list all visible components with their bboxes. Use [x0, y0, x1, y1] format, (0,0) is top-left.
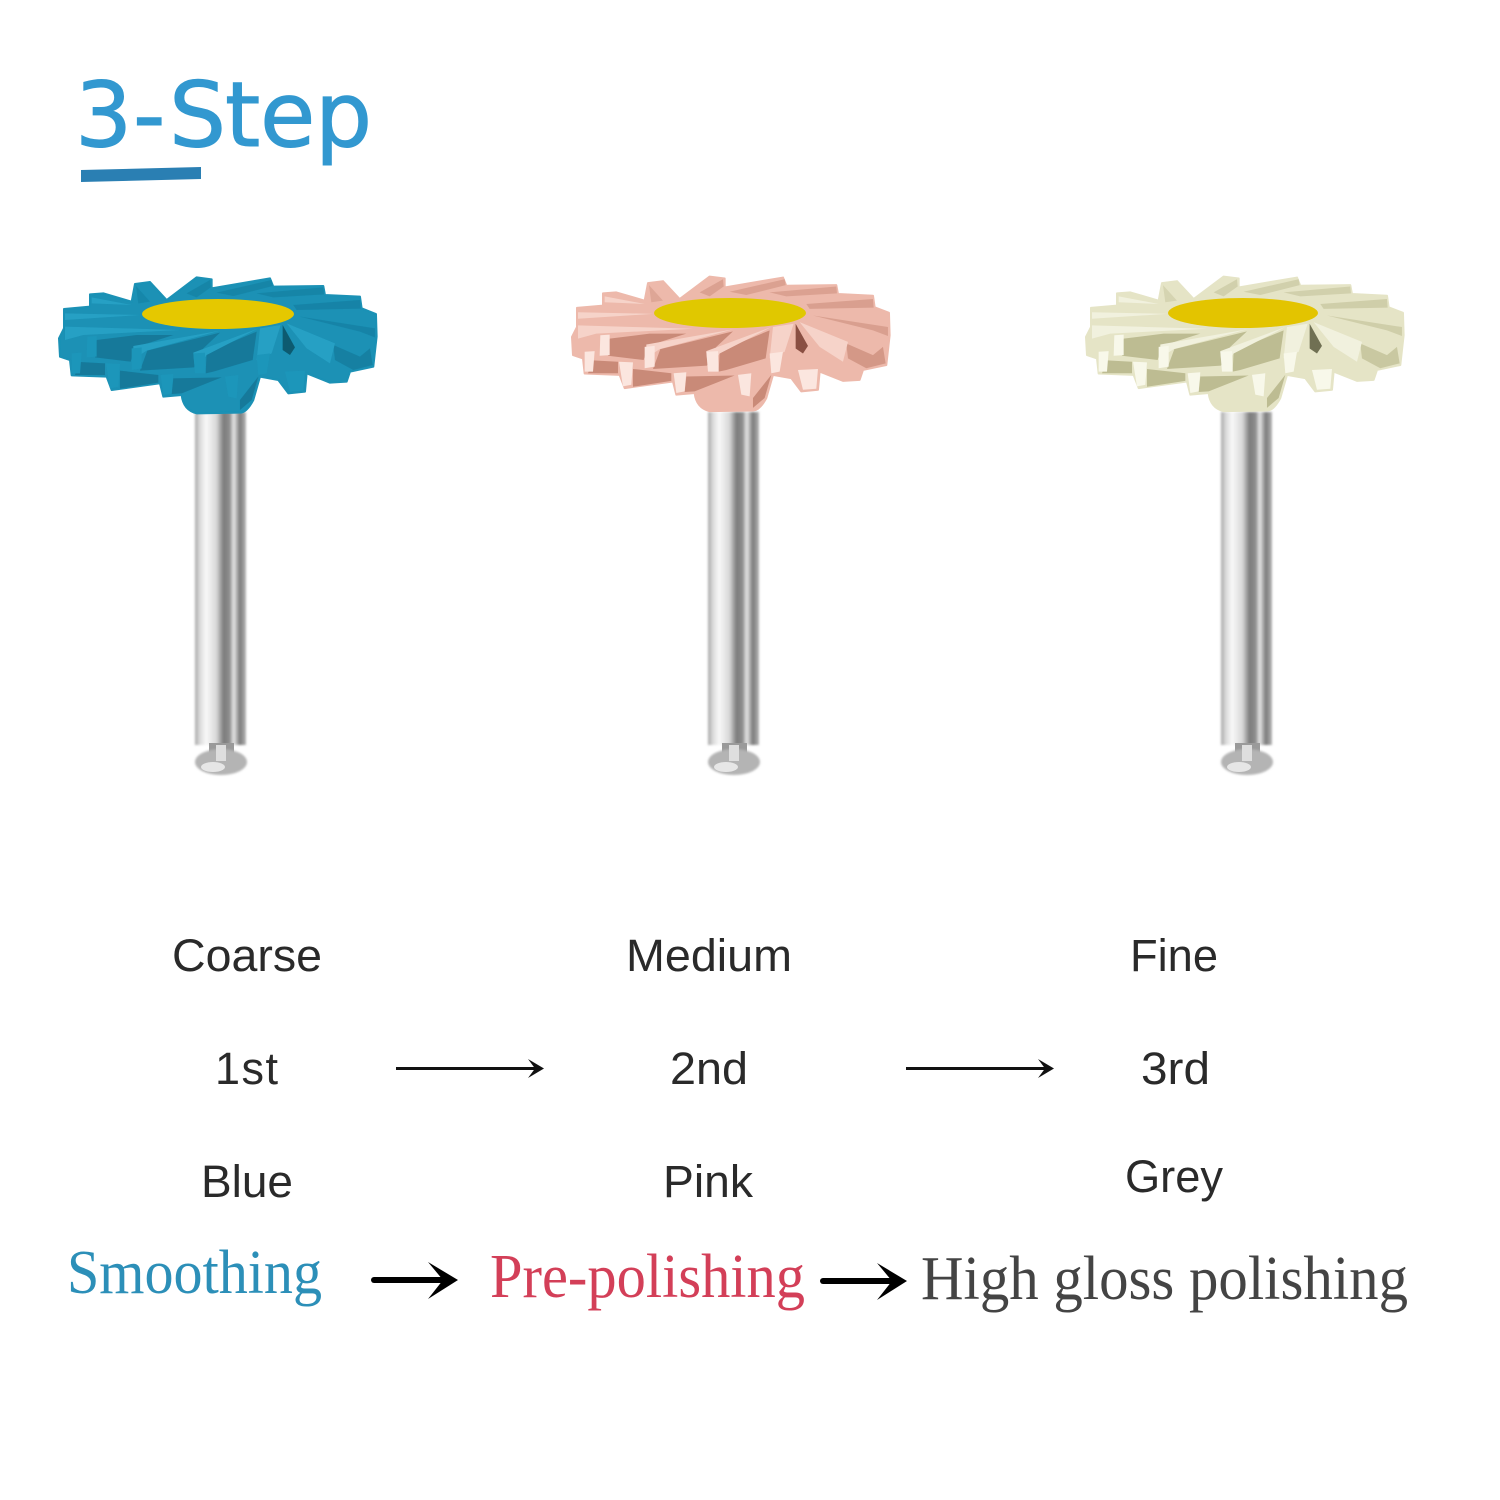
arrow: Pre-polishing to High gloss polishing	[820, 1263, 907, 1300]
label: Blue: Blue	[201, 1156, 293, 1207]
label: Medium: Medium	[626, 930, 792, 981]
arrow: 2nd to 3rd	[906, 1059, 1054, 1078]
title text: 3-Step: 3-Step	[75, 63, 372, 168]
label: 3rd: 3rd	[1141, 1043, 1210, 1094]
table: grit, order, colour	[172, 930, 1224, 1207]
title	[75, 63, 372, 182]
arrow: Smoothing to Pre-polishing	[371, 1262, 458, 1299]
polishing tool: blue coarse	[59, 277, 377, 775]
polishing tool: grey fine	[1086, 277, 1404, 775]
label: Fine: Fine	[1130, 930, 1218, 981]
label: Pink: Pink	[663, 1156, 754, 1207]
label: 1st: 1st	[215, 1043, 278, 1094]
title underline	[81, 167, 201, 182]
process: Smoothing: Smoothing	[67, 1239, 322, 1307]
process: Pre-polishing: Pre-polishing	[490, 1243, 805, 1311]
label: Grey: Grey	[1125, 1151, 1224, 1202]
arrow: 1st to 2nd	[396, 1059, 544, 1078]
label: Coarse: Coarse	[172, 930, 322, 981]
polishing tool: pink medium	[572, 277, 890, 775]
process: High gloss polishing: High gloss polishing	[921, 1245, 1408, 1313]
label: 2nd: 2nd	[670, 1043, 748, 1094]
